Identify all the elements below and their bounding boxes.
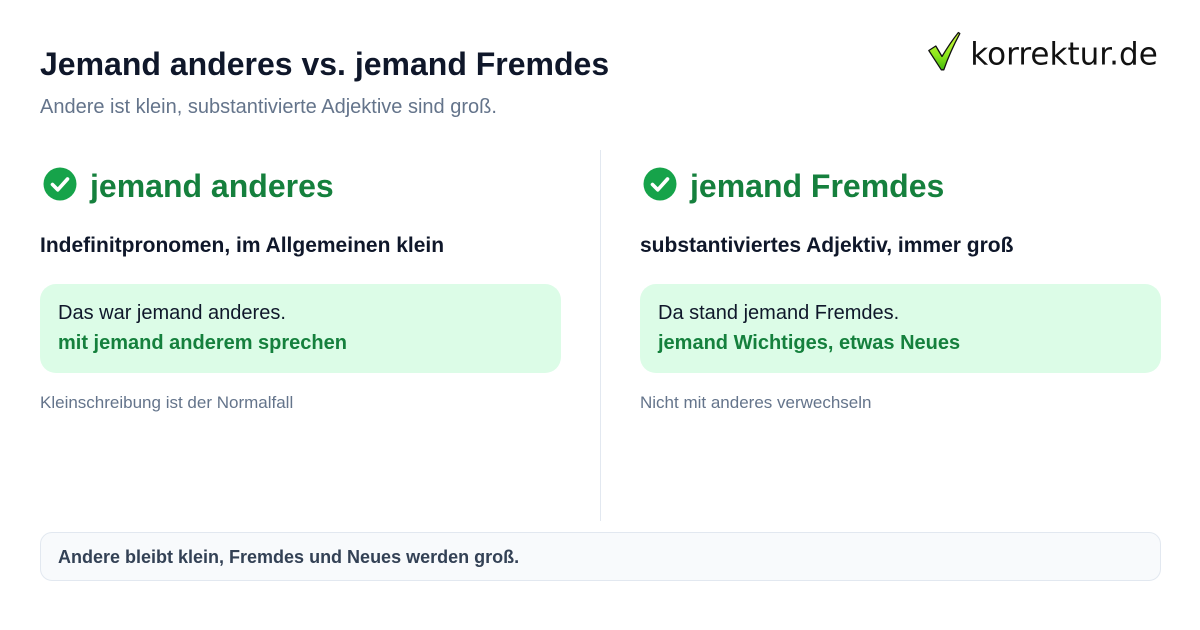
icon: green check circle xyxy=(44,168,76,200)
rule description: substantiviertes Adjektiv, immer groß xyxy=(640,234,1013,257)
example sentence: Da stand jemand Fremdes. xyxy=(658,302,899,324)
note: Kleinschreibung ist der Normalfall xyxy=(40,393,293,412)
example phrase: mit jemand anderem sprechen xyxy=(58,332,347,354)
rule description: Indefinitpronomen, im Allgemeinen klein xyxy=(40,234,444,257)
example box xyxy=(40,284,561,373)
logo wordmark: korrektur.de xyxy=(970,36,1158,72)
panel: jemand anderes xyxy=(40,168,561,412)
note: Nicht mit anderes verwechseln xyxy=(640,393,871,412)
icon: green check circle xyxy=(644,168,676,200)
icon: logo check mark xyxy=(929,33,960,70)
callout text: Andere bleibt klein, Fremdes und Neues werden groß. xyxy=(58,547,519,567)
footer callout xyxy=(40,532,1161,581)
divider xyxy=(600,150,601,521)
panel: jemand Fremdes xyxy=(640,168,1161,412)
example phrase: jemand Wichtiges, etwas Neues xyxy=(658,332,960,354)
example box xyxy=(640,284,1161,373)
subtitle: Andere ist klein, substantivierte Adjektive sind groß. xyxy=(40,96,497,118)
example sentence: Das war jemand anderes. xyxy=(58,302,286,324)
title: Jemand anderes vs. jemand Fremdes xyxy=(40,46,609,82)
logo: korrektur.de xyxy=(928,32,1158,72)
panel heading: jemand Fremdes xyxy=(690,168,944,204)
panel heading: jemand anderes xyxy=(90,168,334,204)
